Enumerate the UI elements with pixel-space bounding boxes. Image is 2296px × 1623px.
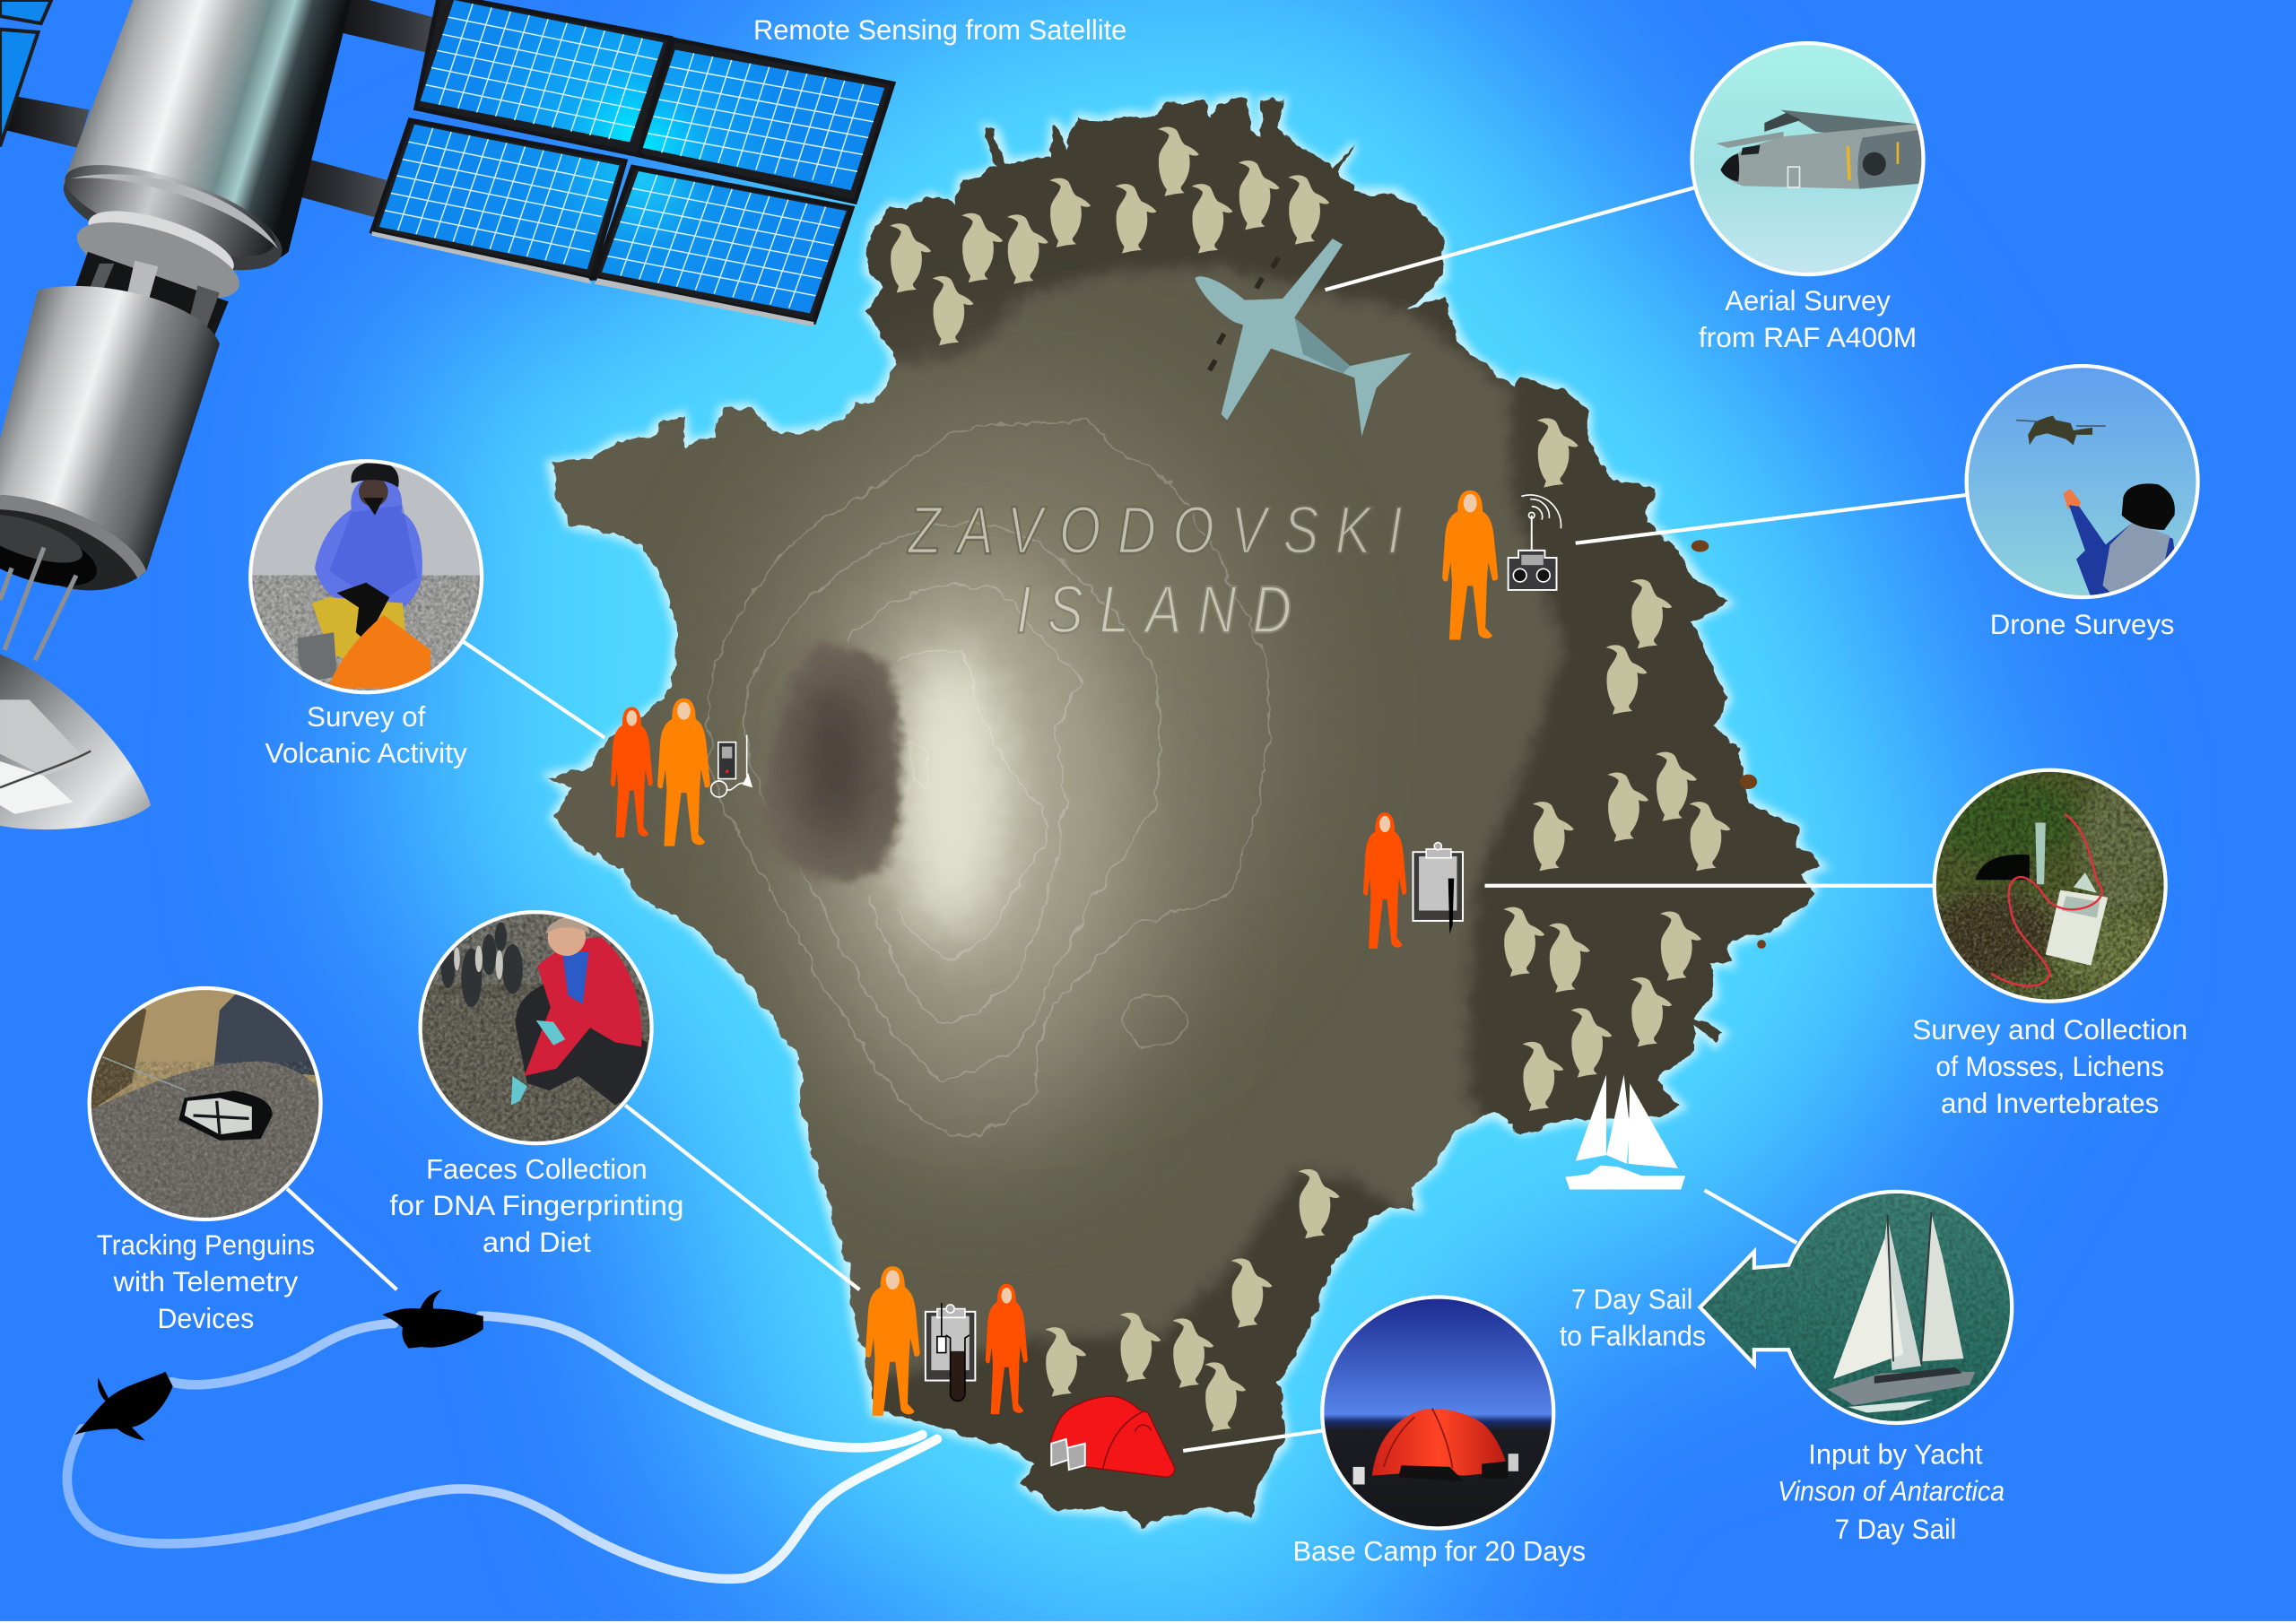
label: volcanic survey: Survey of <box>307 700 425 733</box>
label: drone surveys: Drone Surveys <box>1990 608 2174 640</box>
satellite <box>0 0 893 829</box>
icon: expedition tent <box>1050 1396 1175 1477</box>
line: moss survey <box>1485 884 1935 887</box>
island map <box>512 98 1822 1527</box>
line: aerial survey <box>1326 187 1696 290</box>
label: yacht input: Input by Yacht <box>1808 1438 1983 1471</box>
penguin track <box>67 1316 937 1579</box>
label: volcanic survey <box>265 700 467 769</box>
label: yacht input: 7 Day Sail <box>1835 1513 1956 1545</box>
label: tracking penguins <box>97 1228 315 1334</box>
icon: sample clipboard and tube <box>926 1303 975 1401</box>
figure: south scientist red <box>986 1284 1028 1414</box>
label: tracking penguins: Tracking Penguins <box>97 1228 315 1261</box>
line: base camp <box>1183 1430 1326 1451</box>
photo: volcanic survey <box>246 456 486 695</box>
photo: moss survey <box>1926 768 2167 1002</box>
line: tracking <box>287 1189 396 1289</box>
figure: volcano scientist orange <box>657 699 710 846</box>
label: faeces collection: for DNA Fingerprinting <box>389 1189 683 1221</box>
label: faeces collection: Faeces Collection <box>426 1152 648 1185</box>
photo: drone pilot <box>1965 365 2199 603</box>
collar <box>81 197 241 291</box>
label: moss survey <box>1912 1013 2187 1119</box>
figure: south scientist orange <box>865 1266 920 1416</box>
figure: clipboard scientist <box>1363 812 1406 949</box>
label: yacht input: Vinson of Antarctica <box>1778 1474 2005 1506</box>
icon: swimming penguin lower <box>74 1372 173 1440</box>
island name: ZAVODOVSKI <box>907 493 1403 568</box>
label: sail to Falklands <box>1560 1283 1706 1351</box>
icon: drone controller <box>1509 495 1561 590</box>
contour lines <box>709 419 1268 1133</box>
line: yacht <box>1704 1190 1796 1243</box>
photo: penguin tag <box>85 984 334 1229</box>
label: sail to Falklands: to Falklands <box>1560 1319 1706 1351</box>
label: tracking penguins: Devices <box>158 1302 254 1334</box>
label: aerial survey: Aerial Survey <box>1725 284 1891 317</box>
icon: swimming penguin upper <box>382 1289 483 1349</box>
label: moss survey: Survey and Collection <box>1912 1013 2187 1046</box>
line: volcanic survey <box>463 641 604 738</box>
icon: gas meter <box>711 735 752 797</box>
icon: yacht <box>1565 1074 1685 1190</box>
label: faeces collection: and Diet <box>483 1226 591 1258</box>
label: tracking penguins: with Telemetry <box>113 1265 298 1298</box>
lighter island interior <box>512 266 1562 1384</box>
label: aerial survey: from RAF A400M <box>1699 321 1917 353</box>
label: volcanic survey: Volcanic Activity <box>265 737 467 769</box>
label: moss survey: and Invertebrates <box>1941 1087 2159 1119</box>
offshore islets <box>1692 540 1766 949</box>
label: sail to Falklands: 7 Day Sail <box>1571 1283 1692 1315</box>
figure: drone pilot <box>1442 490 1498 639</box>
upper cylinder <box>63 0 352 267</box>
volcanic crater <box>765 644 900 880</box>
coastal glow <box>551 98 1822 1527</box>
solar panel arms <box>0 0 445 218</box>
penguin colony <box>890 126 1731 1432</box>
icon: aircraft over island <box>1195 239 1412 437</box>
line: faeces collection <box>625 1106 859 1289</box>
island name <box>907 493 1403 647</box>
support rods <box>0 548 76 660</box>
lower cylinder <box>0 286 220 580</box>
figure: volcano scientist red <box>611 707 653 838</box>
photo: base camp <box>1318 1297 1560 1532</box>
heading: satellite: Remote Sensing from Satellite <box>753 13 1126 46</box>
solar panels <box>372 0 893 322</box>
label: aerial survey <box>1699 284 1917 353</box>
label: yacht input <box>1778 1438 2005 1545</box>
dish <box>0 655 151 829</box>
line: drone survey <box>1576 495 1968 543</box>
island name: ISLAND <box>1016 572 1292 647</box>
photo: yacht with arrow <box>1692 1185 2021 1435</box>
label: faeces collection <box>389 1152 683 1258</box>
photo: RAF A400M <box>1691 42 1927 276</box>
icon: clipboard <box>1413 843 1463 934</box>
label: base camp: Base Camp for 20 Days <box>1293 1534 1586 1567</box>
label: moss survey: of Mosses, Lichens <box>1935 1050 2164 1082</box>
photo: faeces collection <box>417 910 659 1148</box>
lower flange <box>0 495 146 590</box>
